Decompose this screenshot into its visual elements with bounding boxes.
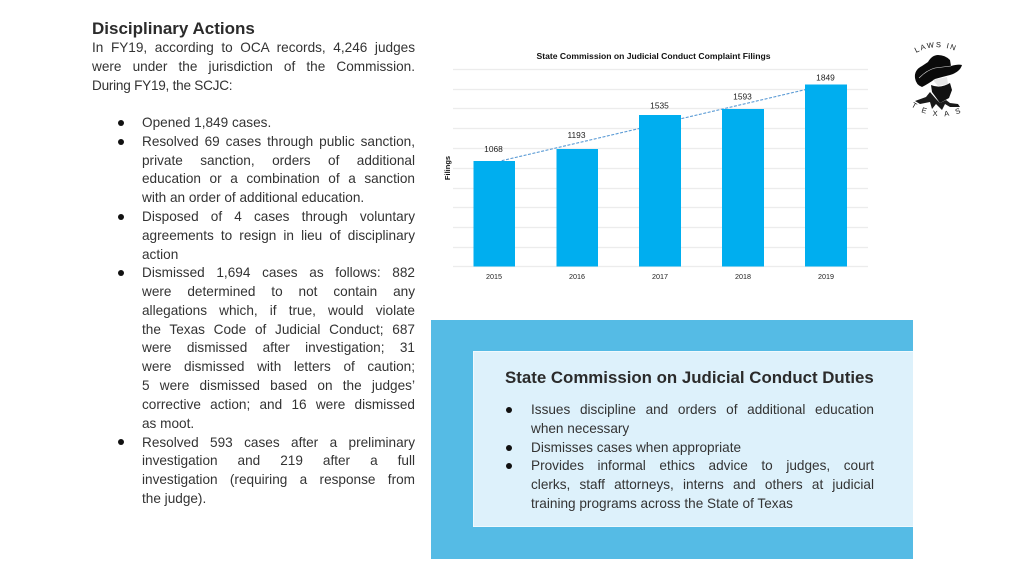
value labels: 1535 <box>650 100 669 110</box>
bullet list: case outcomes: action <box>142 246 178 262</box>
bullet list: case outcomes: were dismissed with letters of caution; <box>142 359 415 374</box>
panel: commission duties <box>431 320 913 559</box>
value labels: 1593 <box>733 92 752 102</box>
bullet list: case outcomes: as moot. <box>142 416 194 430</box>
bullet list: case outcomes: the Texas Code of Judicial Conduct; 687 <box>142 322 415 336</box>
bullet list: case outcomes: allegations which, if true, would violate <box>142 303 415 318</box>
bullet list: case outcomes: Dismissed 1,694 cases as follows: 882 <box>142 265 415 280</box>
year labels: 2016 <box>569 272 585 281</box>
logo text: laws in: LAWS IN <box>914 42 956 53</box>
value labels: 1068 <box>484 144 503 154</box>
value labels: 1849 <box>816 72 835 82</box>
value labels: 1193 <box>567 130 586 140</box>
bullet list: case outcomes: private sanction, orders of additional <box>142 152 415 168</box>
bullet list: case outcomes: with an order of additional education. <box>142 190 364 205</box>
bullet list: case outcomes: the judge). <box>142 491 206 506</box>
bullet list: duties: Dismisses cases when appropriate <box>531 440 741 455</box>
year labels: 2015 <box>486 272 502 281</box>
bullet list: case outcomes: 5 were dismissed based on the judges’ <box>142 378 415 393</box>
heading: duties: State Commission on Judicial Conduct Duties <box>505 368 874 387</box>
bullet list: case outcomes: Resolved 593 cases after a preliminary <box>142 434 415 450</box>
outlaw figure <box>915 55 962 110</box>
panel: disciplinary actions text <box>92 19 415 506</box>
text block: introduction: were under the jurisdiction of the Commission. <box>92 59 415 74</box>
bullet list: case outcomes: corrective action; and 16 were dismissed <box>142 397 415 412</box>
bullet list: case outcomes: Disposed of 4 cases through voluntary <box>142 209 415 224</box>
bullet list: duties: clerks, staff attorneys, interns and others at judicial <box>531 477 874 492</box>
year labels: 2018 <box>735 272 751 281</box>
bullet list: case outcomes: were determined to not contain any <box>142 284 415 299</box>
bullet list: duties: Issues discipline and orders of additional education <box>531 402 874 417</box>
chart title: State Commission on Judicial Conduct Complaint Filings <box>537 51 771 61</box>
bullet list: duties <box>506 402 874 511</box>
bullet list: case outcomes: Resolved 69 cases through public sanction, <box>142 134 415 149</box>
bullet list: duties: when necessary <box>531 421 629 436</box>
bullet list: duties: training programs across the State of Texas <box>531 496 793 511</box>
bullet list: case outcomes: Opened 1,849 cases. <box>142 115 271 130</box>
icon: laws in texas logo <box>912 42 962 116</box>
bullet list: case outcomes: were dismissed after investigation; 31 <box>142 340 415 355</box>
year labels <box>486 272 834 281</box>
text block: introduction: During FY19, the SCJC: <box>92 78 232 92</box>
bullet list: case outcomes <box>118 115 415 506</box>
bar chart: complaint filings <box>443 51 868 281</box>
year labels: 2019 <box>818 272 834 281</box>
bullet list: case outcomes: education or a combination of a sanction <box>142 171 415 186</box>
bullet list: case outcomes: investigation (requiring a response from <box>142 472 415 487</box>
year labels: 2017 <box>652 272 668 281</box>
logo text: texas: TEXAS <box>912 102 960 116</box>
trend line <box>502 89 807 161</box>
y-axis label: Filings <box>443 156 452 180</box>
text block: introduction <box>92 40 415 93</box>
bullet list: case outcomes: agreements to resign in lieu of disciplinary <box>142 228 415 242</box>
bullet list: case outcomes: investigation and 219 after a full <box>142 453 415 468</box>
bars <box>474 84 847 266</box>
text block: introduction: In FY19, according to OCA records, 4,246 judges <box>92 40 415 55</box>
bullet list: duties: Provides informal ethics advice to judges, court <box>531 458 874 473</box>
heading: disciplinary actions: Disciplinary Actions <box>92 19 255 38</box>
value labels <box>484 72 835 154</box>
inner card <box>473 351 913 526</box>
